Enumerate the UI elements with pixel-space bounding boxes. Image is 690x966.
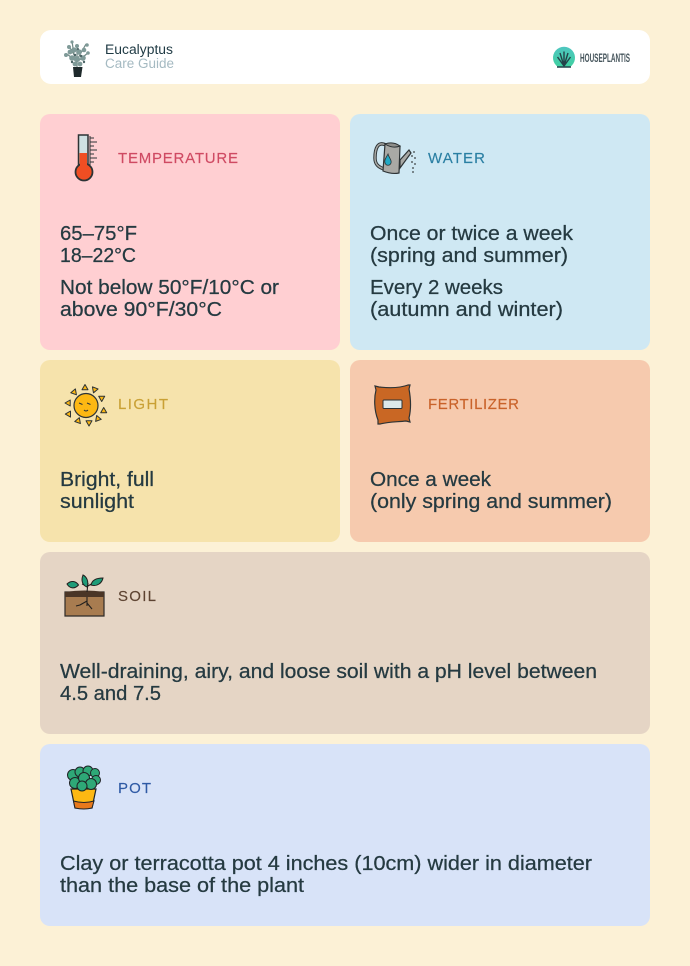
text: temperature range <box>60 223 279 321</box>
text: soil needs: 4.5 and 7.5 <box>60 683 161 705</box>
text: pot needs: than the base of the plant <box>60 875 304 897</box>
text: temperature range: Not below 50°F/10°C or <box>60 277 279 299</box>
icon: fertilizer bag <box>375 385 410 424</box>
text: light needs: sunlight <box>60 491 134 513</box>
text: watering frequency: Once or twice a week <box>370 223 574 245</box>
text: fertilizer frequency: (only spring and summer) <box>370 491 612 513</box>
text: fertilizer frequency <box>370 469 612 513</box>
text: soil needs: Well-draining, airy, and loose soil with a pH level between <box>60 661 597 683</box>
text: temperature range: 18–22°C <box>60 245 136 267</box>
text: temperature range: 65–75°F <box>60 223 137 245</box>
icon: thermometer <box>76 135 97 180</box>
text: watering frequency: Every 2 weeks <box>370 277 503 299</box>
text: light needs <box>60 469 154 513</box>
text: soil needs <box>60 661 597 705</box>
label: light: LIGHT <box>118 396 168 413</box>
label: water: WATER <box>428 150 485 167</box>
icon: soil and sprout <box>65 575 104 616</box>
text: pot needs: Clay or terracotta pot 4 inches (10cm) wider in diameter <box>60 853 592 875</box>
panel: fertilizer <box>350 360 650 542</box>
panel: light <box>40 360 340 542</box>
text: watering frequency: (autumn and winter) <box>370 299 563 321</box>
panel: pot <box>40 744 650 926</box>
label: soil: SOIL <box>118 588 156 605</box>
logo: Houseplantis: HOUSEPLANTIS <box>580 53 630 65</box>
label: pot: POT <box>118 780 151 797</box>
panel: temperature <box>40 114 340 350</box>
text: watering frequency: (spring and summer) <box>370 245 568 267</box>
label: fertilizer: FERTILIZER <box>428 396 519 413</box>
heading: Eucalyptus: Eucalyptus <box>105 42 173 57</box>
label: temperature: TEMPERATURE <box>118 150 238 167</box>
text: temperature range: above 90°F/30°C <box>60 299 222 321</box>
panel: water <box>350 114 650 350</box>
icon: sun <box>65 384 107 426</box>
text: watering frequency <box>370 223 574 321</box>
icon: watering can <box>375 143 416 173</box>
icon: potted plant <box>68 766 100 809</box>
text: light needs: Bright, full <box>60 469 154 491</box>
text: fertilizer frequency: Once a week <box>370 469 492 491</box>
panel: soil <box>40 552 650 734</box>
logo: Houseplantis <box>553 47 630 67</box>
icon: eucalyptus plant <box>64 40 90 77</box>
text: pot needs <box>60 853 592 897</box>
subheading: Care Guide: Care Guide <box>105 56 174 71</box>
header bar <box>40 30 650 84</box>
